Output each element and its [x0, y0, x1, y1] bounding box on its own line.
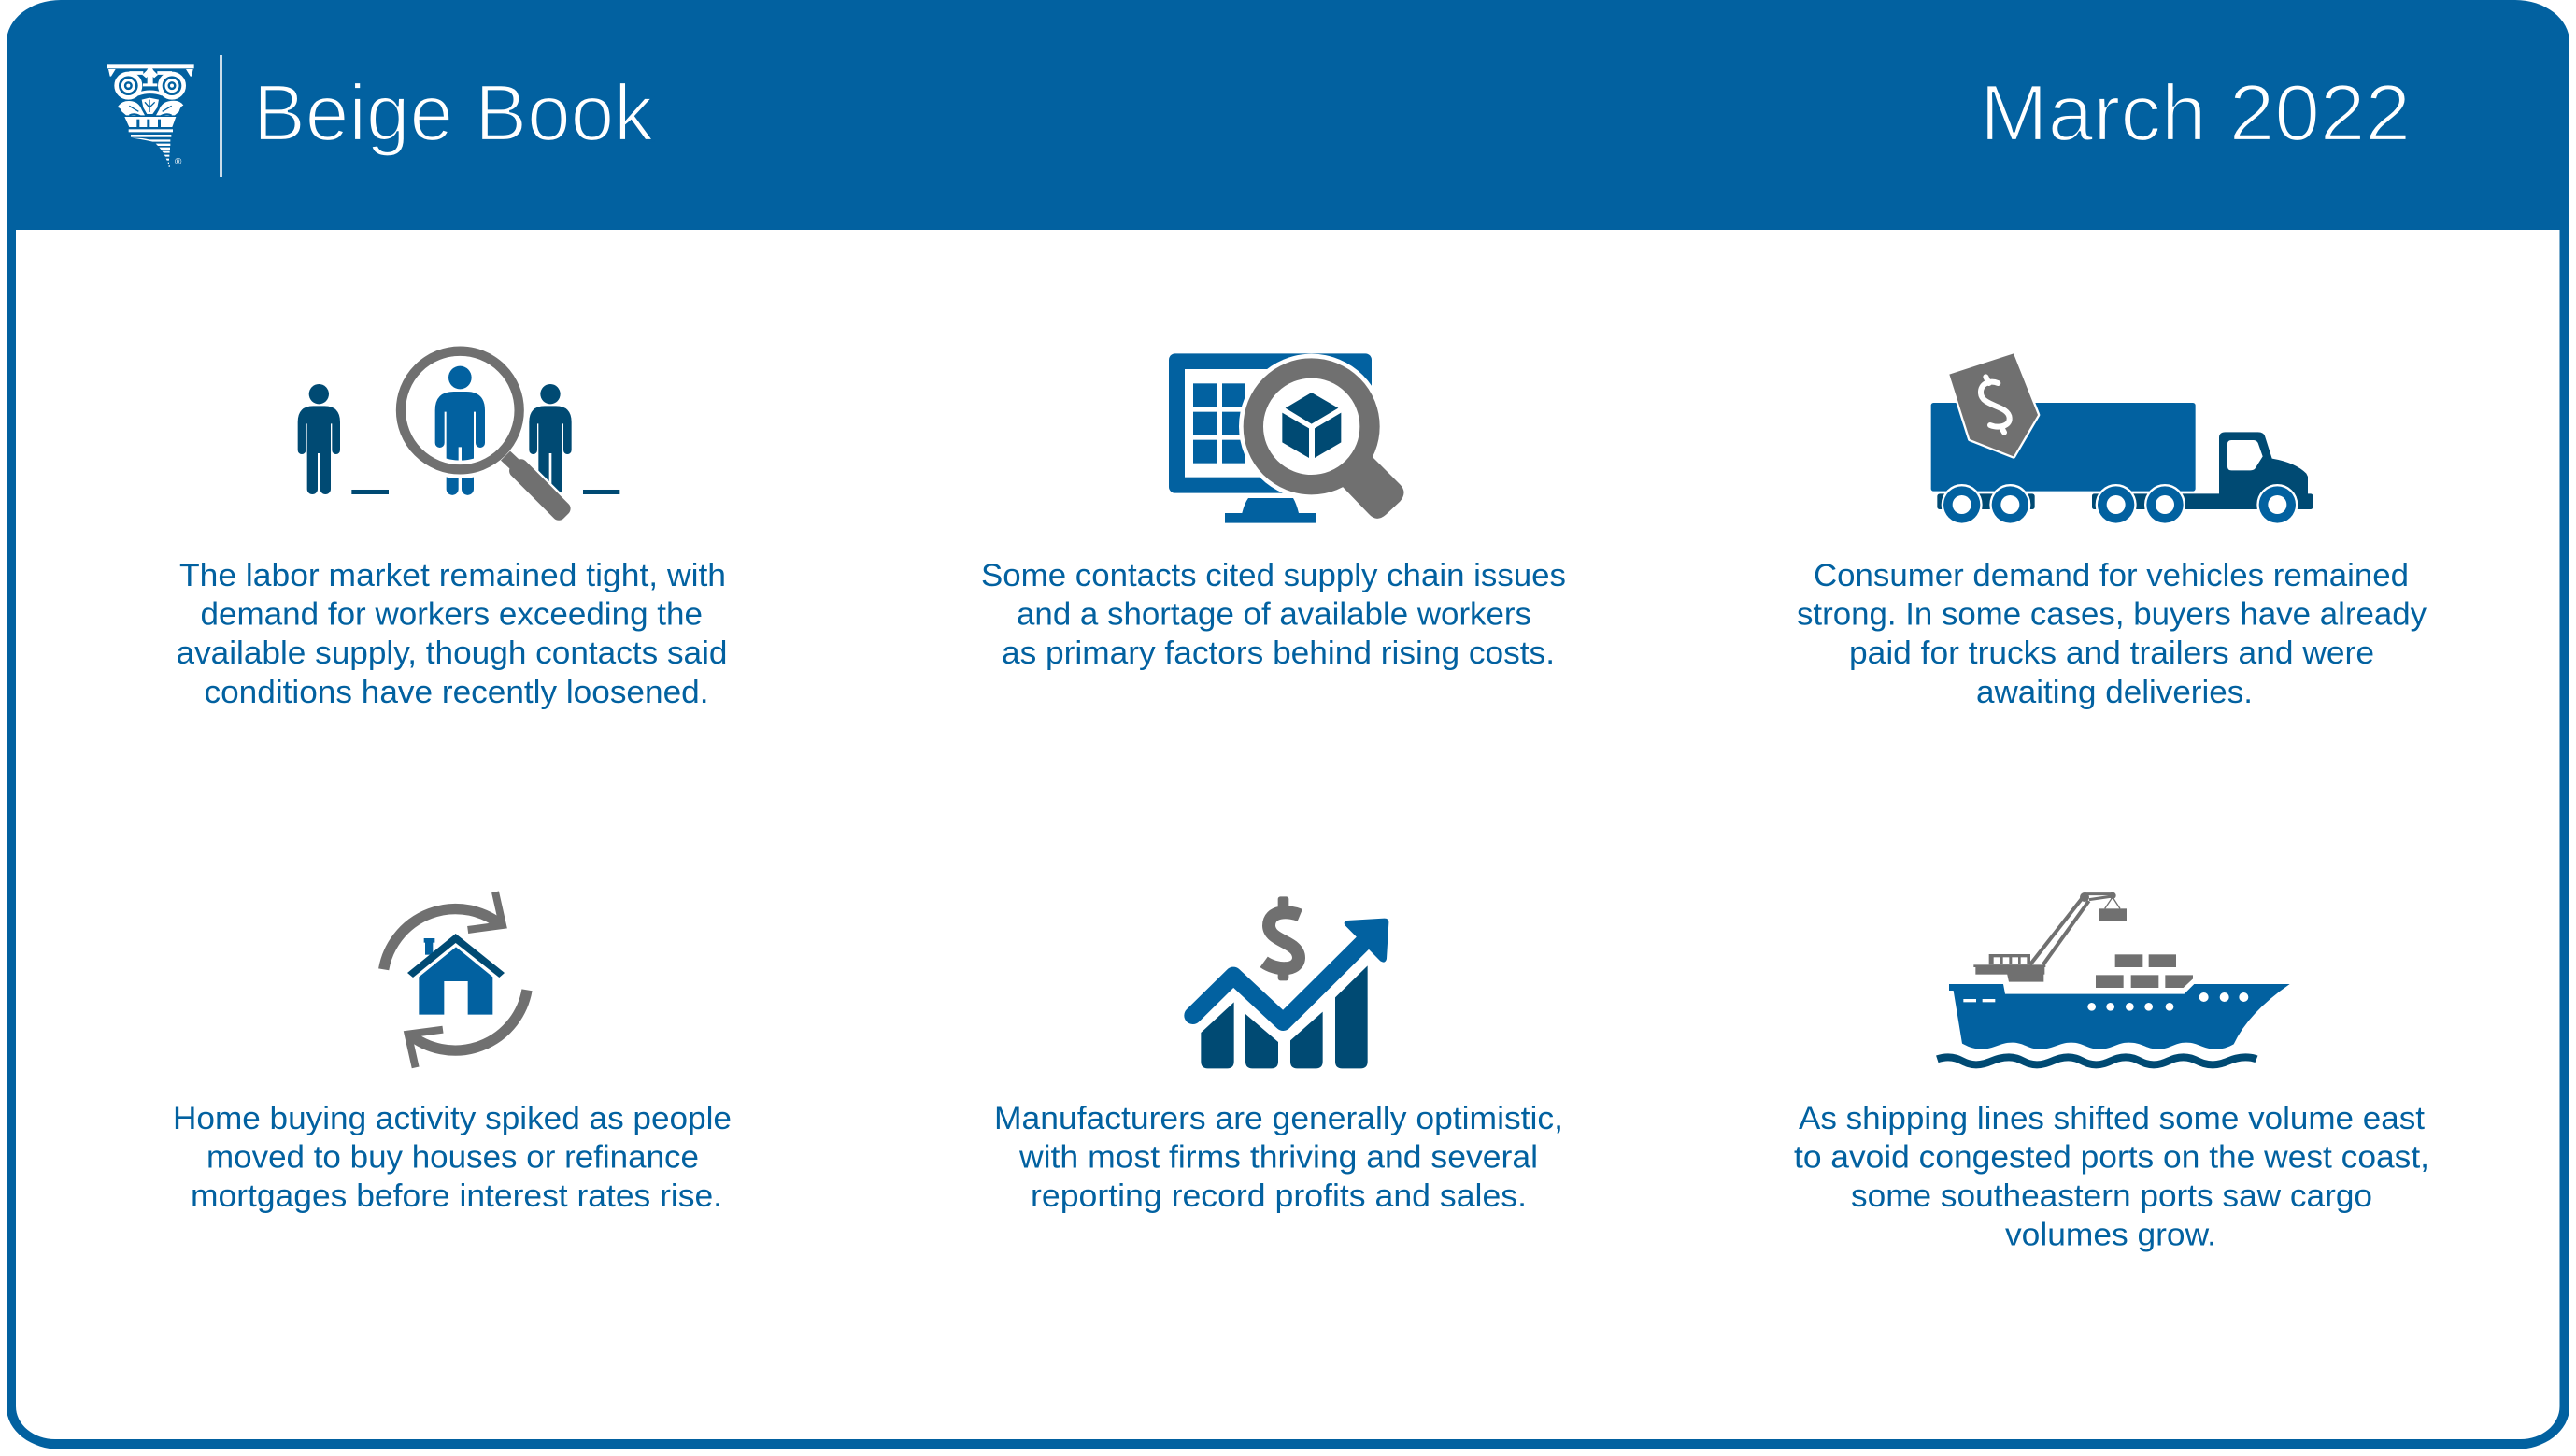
text: rising costs [981, 558, 1566, 671]
text: home buying [173, 1101, 732, 1214]
icon: monitor with magnifier and box [1169, 353, 1403, 523]
text: vehicle demand [1797, 558, 2427, 710]
text: vehicle demand: Consumer demand for vehicles remained [1814, 558, 2409, 593]
text: manufacturers: Manufacturers are generally optimistic, [994, 1101, 1563, 1136]
text: shipping: to avoid congested ports on the west coast, [1794, 1140, 2429, 1176]
text: shipping: As shipping lines shifted some volume east [1799, 1101, 2426, 1136]
text: labor market: available supply, though contacts said [176, 635, 727, 671]
text: home buying: mortgages before interest rates rise. [191, 1178, 722, 1214]
logo: column capital [107, 64, 194, 167]
icon: truck with price tag [1931, 353, 2313, 523]
text: vehicle demand: strong. In some cases, buyers have already [1797, 596, 2427, 632]
text: manufacturers: reporting record profits and sales. [1031, 1178, 1527, 1214]
text: shipping [1794, 1101, 2429, 1252]
text: home buying: moved to buy houses or refinance [206, 1140, 699, 1176]
text: rising costs: and a shortage of available workers [1017, 596, 1531, 632]
text: rising costs: Some contacts cited supply chain issues [981, 558, 1566, 593]
text: vehicle demand: paid for trucks and trailers and were [1849, 635, 2374, 671]
panel: manufacturers [994, 896, 1563, 1214]
header divider [220, 55, 222, 177]
panel: vehicle demand [1797, 353, 2427, 710]
icon: cargo ship with crane [1937, 892, 2290, 1064]
title: Beige Book: Beige Book [253, 69, 653, 158]
icon: dollar sign over rising chart [1193, 896, 1388, 1068]
text: manufacturers: with most firms thriving and several [1018, 1140, 1538, 1176]
text: manufacturers [994, 1101, 1563, 1214]
panel: rising costs [981, 353, 1566, 671]
panel: labor market [176, 351, 727, 710]
text: rising costs: as primary factors behind rising costs. [1002, 635, 1555, 671]
logo: registered mark: ® [175, 157, 182, 167]
text: labor market: demand for workers exceeding the [200, 596, 703, 632]
header band [107, 55, 2411, 177]
panel: home buying [173, 892, 732, 1214]
text: home buying: Home buying activity spiked as people [173, 1101, 732, 1136]
text: labor market: conditions have recently loosened. [204, 675, 708, 710]
text: shipping: some southeastern ports saw cargo [1851, 1178, 2372, 1214]
icon: house with circular arrows [384, 892, 527, 1067]
panel: shipping [1794, 892, 2429, 1252]
text: labor market: The labor market remained tight, with [179, 558, 726, 593]
text: vehicle demand: awaiting deliveries. [1976, 675, 2253, 710]
date: March 2022: March 2022 [1980, 69, 2411, 158]
text: labor market [176, 558, 727, 710]
text: shipping: volumes grow. [2005, 1217, 2216, 1252]
icon: magnifier over workers [298, 351, 619, 523]
